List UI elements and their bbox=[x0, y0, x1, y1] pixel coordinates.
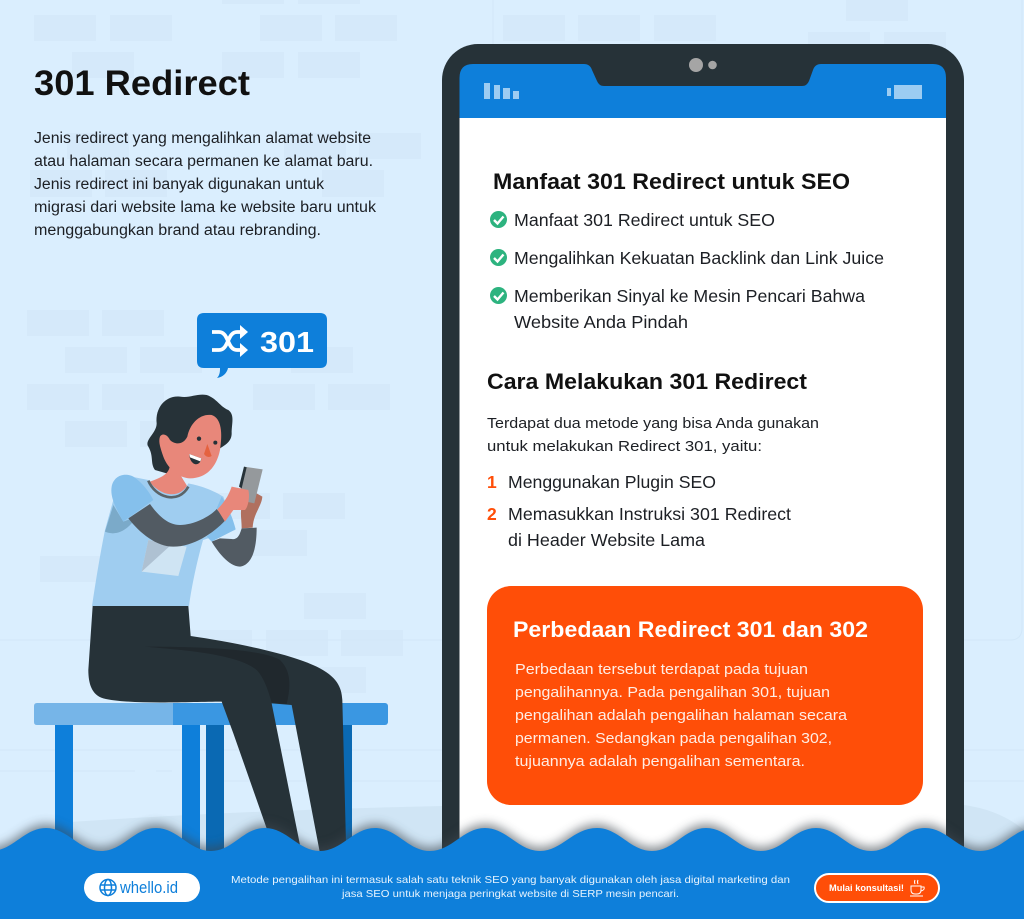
icon: coffee cup bbox=[910, 880, 924, 896]
icon: shuffle arrows bbox=[212, 325, 248, 357]
intro text block bbox=[34, 130, 376, 239]
benefits checklist: Memberikan Sinyal ke Mesin Pencari Bahwa bbox=[514, 286, 865, 306]
benefits checklist: Website Anda Pindah bbox=[514, 312, 688, 332]
title: 301 Redirect bbox=[34, 64, 250, 103]
how-to intro text bbox=[487, 415, 819, 455]
benefits checklist bbox=[490, 210, 884, 332]
icon: battery bbox=[887, 85, 922, 99]
footer text bbox=[231, 874, 790, 900]
camera bbox=[689, 58, 717, 72]
icon: check 2 bbox=[490, 249, 507, 266]
benefits checklist: Manfaat 301 Redirect untuk SEO bbox=[514, 210, 775, 230]
phone status bar bbox=[460, 64, 946, 118]
back hand and phone bbox=[241, 493, 262, 528]
speech bubble: 301: 301 bbox=[260, 327, 314, 359]
bench bbox=[34, 703, 388, 854]
heading: how to: Cara Melakukan 301 Redirect bbox=[487, 369, 808, 394]
numbered list: di Header Website Lama bbox=[508, 530, 705, 550]
numbered list: 1 bbox=[487, 472, 497, 492]
callout: differences 301 vs 302: pengalihan adalah pengalihan halaman secara bbox=[515, 707, 848, 724]
phone mockup bbox=[442, 44, 964, 904]
numbered list: Memasukkan Instruksi 301 Redirect bbox=[508, 504, 791, 524]
footer text: jasa SEO untuk menjaga peringkat website di SERP mesin pencari. bbox=[341, 888, 679, 900]
speech bubble: 301 bbox=[197, 313, 327, 378]
CTA button: Mulai konsultasi! bbox=[829, 883, 904, 894]
intro text block: Jenis redirect yang mengalihkan alamat website bbox=[34, 130, 371, 147]
logo pill: whello.id bbox=[84, 873, 200, 902]
shirt bbox=[92, 475, 235, 606]
upper body bbox=[92, 395, 263, 606]
logo pill: whello.id: whello.id bbox=[119, 878, 178, 897]
pocket bbox=[142, 540, 187, 576]
collar bbox=[148, 481, 188, 497]
how-to intro text: untuk melakukan Redirect 301, yaitu: bbox=[487, 438, 762, 455]
sleeves bbox=[212, 528, 257, 567]
callout: differences 301 vs 302: permanen. Sedangkan pada pengalihan 302, bbox=[515, 730, 832, 747]
numbered list: 2 bbox=[487, 504, 497, 524]
benefits checklist: Mengalihkan Kekuatan Backlink dan Link Juice bbox=[514, 248, 884, 268]
callout: differences 301 vs 302: tujuannya adalah pengalihan sementara. bbox=[515, 753, 805, 770]
CTA button bbox=[815, 874, 939, 902]
intro text block: migrasi dari website lama ke website baru untuk bbox=[34, 199, 376, 216]
legs bbox=[88, 606, 346, 853]
callout: differences 301 vs 302: Perbedaan Redirect 301 dan 302 bbox=[513, 617, 868, 642]
footer text: Metode pengalihan ini termasuk salah satu teknik SEO yang banyak digunakan oleh jasa digital marketing dan bbox=[231, 874, 790, 886]
intro text block: Jenis redirect ini banyak digunakan untuk bbox=[34, 176, 324, 193]
hair bbox=[147, 395, 232, 473]
footer wave band bbox=[0, 824, 1024, 919]
intro text block: atau halaman secara permanen ke alamat baru. bbox=[34, 153, 373, 170]
icon: signal bars bbox=[484, 83, 519, 99]
heading: benefits: Manfaat 301 Redirect untuk SEO bbox=[493, 169, 850, 194]
callout: differences 301 vs 302: pengalihannya. Pada pengalihan 301, tujuan bbox=[515, 684, 830, 701]
numbered list: Menggunakan Plugin SEO bbox=[508, 472, 716, 492]
intro text block: menggabungkan brand atau rebranding. bbox=[34, 222, 321, 239]
numbered list bbox=[487, 472, 791, 550]
icon: globe bbox=[100, 880, 116, 896]
icon: check 3 bbox=[490, 287, 507, 304]
face bbox=[159, 415, 221, 478]
callout: differences 301 vs 302 bbox=[487, 586, 923, 805]
neck bbox=[150, 463, 188, 497]
callout: differences 301 vs 302: Perbedaan tersebut terdapat pada tujuan bbox=[515, 661, 808, 678]
icon: check 1 bbox=[490, 211, 507, 228]
front hand bbox=[217, 487, 249, 522]
how-to intro text: Terdapat dua metode yang bisa Anda gunakan bbox=[487, 415, 819, 432]
character: person with phone bbox=[88, 395, 346, 853]
